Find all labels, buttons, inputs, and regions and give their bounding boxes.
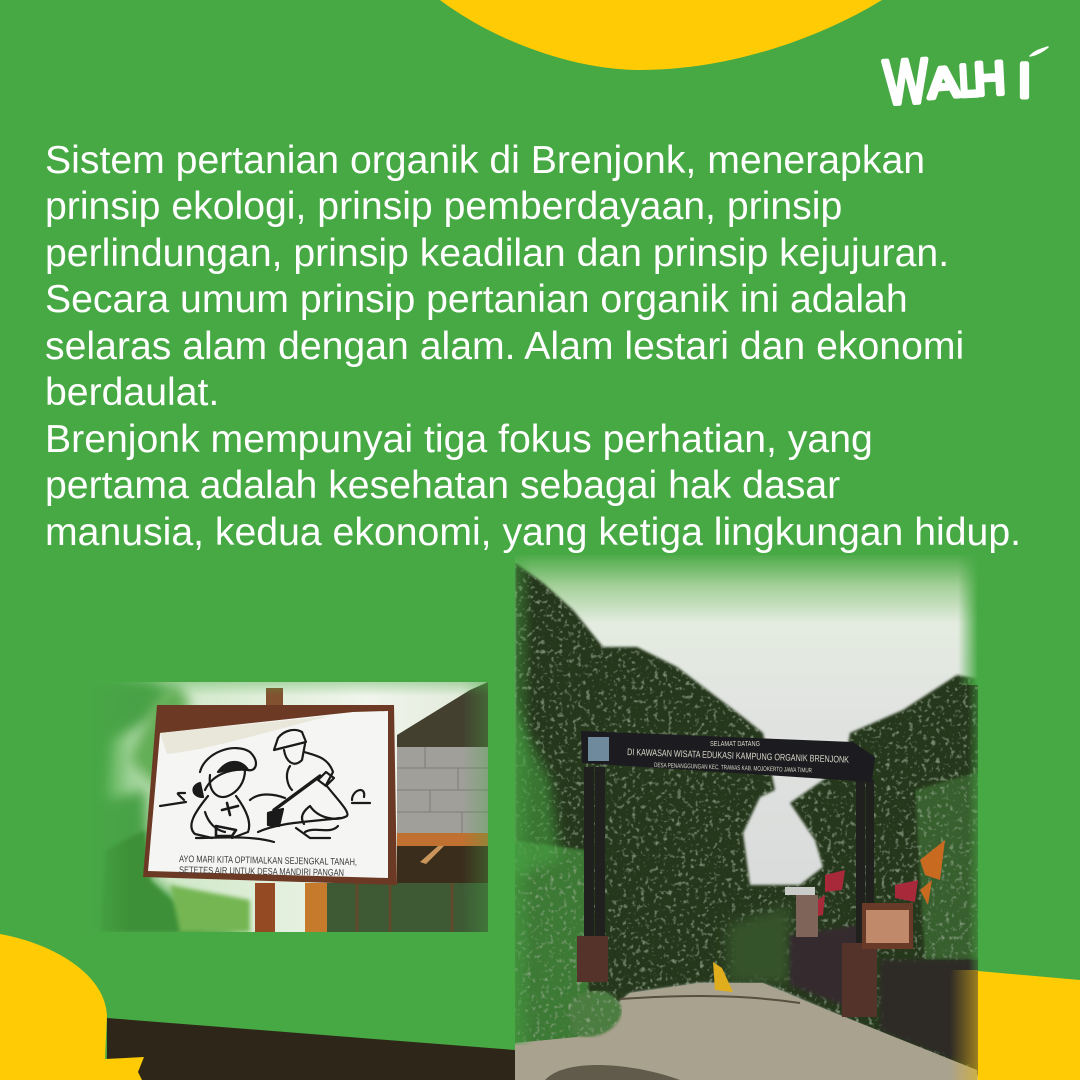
house roof — [397, 682, 488, 752]
girl — [200, 748, 256, 790]
red and purple shrubs — [790, 925, 860, 1012]
body text: Sistem pertanian organik di Brenjonk, menerapkan — [45, 139, 925, 182]
brick wall — [397, 747, 488, 833]
gate pillars — [584, 767, 874, 945]
photo: Kampung Organik Brenjonk gate — [505, 555, 985, 1080]
gate lettering — [627, 741, 850, 775]
body text: Secara umum prinsip pertanian organik ini adalah — [45, 278, 908, 321]
logo: WALHI: A — [926, 58, 961, 107]
distant road vista — [728, 905, 790, 983]
gate bases — [577, 936, 608, 982]
body text: pertama adalah kesehatan sebagai hak dasar — [45, 464, 840, 507]
yellow shape: bottom right corner — [978, 971, 1080, 1080]
road — [515, 983, 977, 1080]
logo: WALHI: L — [958, 56, 979, 106]
dark brown ground band — [107, 1018, 515, 1080]
banana foliage — [92, 682, 254, 932]
gate lettering: DI KAWASAN WISATA EDUKASI KAMPUNG ORGANIK BRENJONK — [627, 747, 850, 766]
wooden sign — [862, 903, 913, 949]
line drawing of farmers — [160, 730, 370, 842]
body text: prinsip ekologi, prinsip pemberdayaan, prinsip — [45, 185, 842, 228]
ground and bushes — [160, 790, 370, 806]
body text: Brenjonk mempunyai tiga fokus perhatian, yang — [45, 418, 873, 461]
person in yellow — [713, 962, 733, 992]
body text: berdaulat. — [45, 371, 219, 414]
body text: selaras alam dengan alam. Alam lestari dan ekonomi — [45, 325, 964, 368]
gate lettering: SELAMAT DATANG — [710, 741, 760, 748]
logo: WALHI: I — [1018, 55, 1031, 108]
poster caption — [179, 855, 356, 876]
poster caption: SETETES AIR UNTUK DESA MANDIRI PANGAN — [179, 865, 344, 879]
body text — [45, 139, 1021, 554]
gate lettering: DESA PENANGGUNGAN KEC. TRAWAS KAB. MOJOKERTO JAWA TIMUR — [654, 762, 812, 775]
yellow shape: bottom left blob — [0, 934, 144, 1080]
tree canopy — [505, 563, 985, 1078]
poster paper — [148, 711, 388, 878]
board posts — [266, 688, 283, 706]
board frame — [143, 705, 397, 885]
body text: perlindungan, prinsip keadilan dan prinsip kejujuran. — [45, 232, 949, 275]
soft edges — [958, 555, 978, 685]
gate beam — [581, 731, 875, 782]
man — [274, 730, 306, 750]
poster caption: AYO MARI KITA OPTIMALKAN SEJENGKAL TANAH, — [179, 854, 357, 868]
logo: WALHI — [882, 47, 1048, 118]
soft green edges — [99, 734, 126, 932]
logo: WALHI: W — [882, 47, 930, 118]
photo: poster board with farmers — [102, 682, 488, 932]
yellow shape: top wave — [440, 0, 882, 70]
body text: manusia, kedua ekonomi, yang ketiga lingkungan hidup. — [45, 511, 1021, 554]
roadside shrub — [568, 991, 622, 1037]
eaves and house front — [397, 833, 488, 846]
logo: WALHI: H — [973, 51, 1006, 105]
small house — [796, 895, 818, 937]
